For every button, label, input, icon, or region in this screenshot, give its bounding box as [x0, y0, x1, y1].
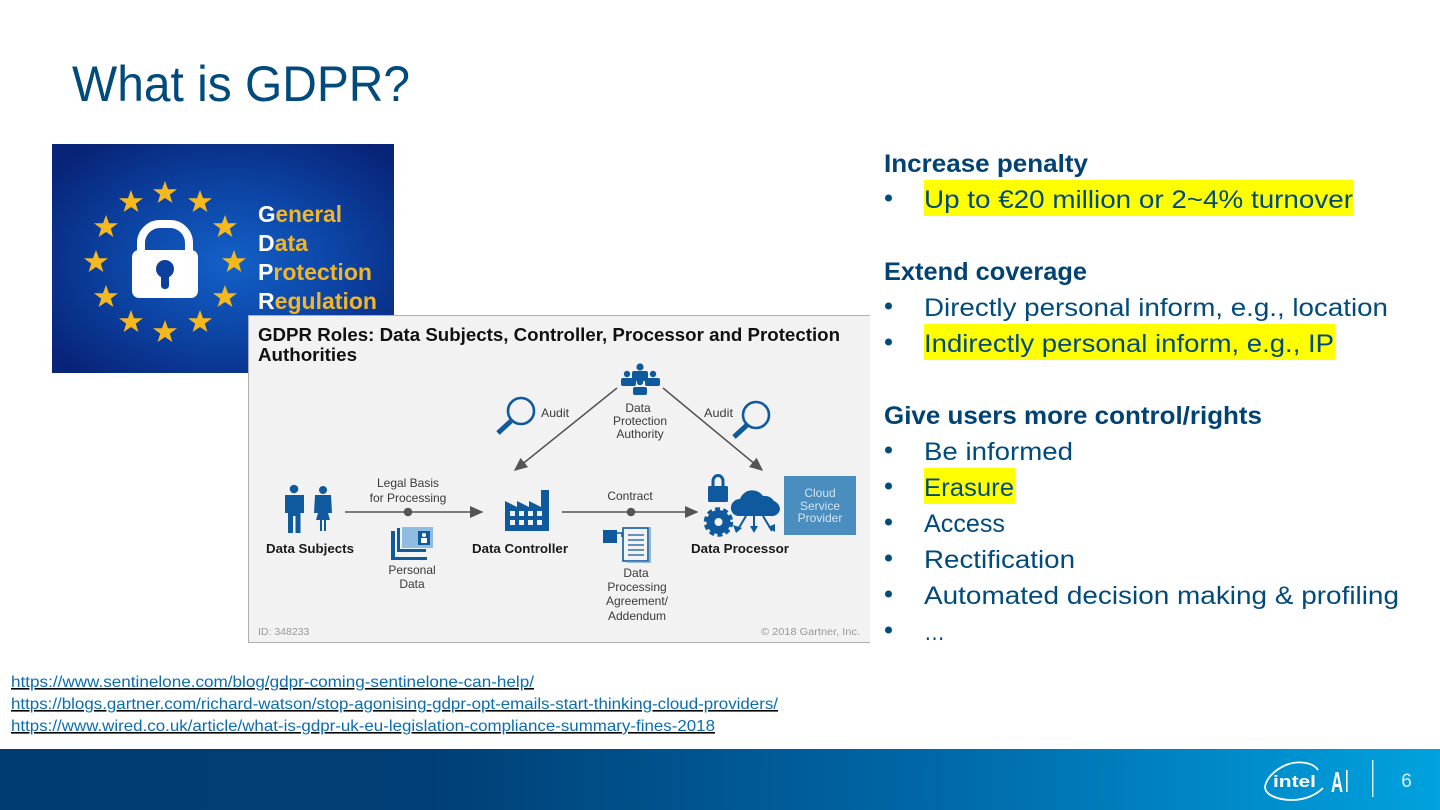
box: cloud service provider: Provider	[798, 511, 842, 525]
text block: increase penalty: Up to €20 million or 2~4% turnover	[924, 186, 1353, 214]
icon: padlock	[132, 224, 198, 298]
label: audit left: Audit	[541, 406, 570, 420]
banner text: General	[258, 201, 342, 227]
arrow: authority audits controller	[515, 388, 617, 470]
box: cloud service provider	[784, 476, 856, 535]
text block: extend coverage	[884, 258, 1388, 360]
text block: user rights: Rectification	[924, 546, 1075, 574]
icon: left magnifier	[498, 398, 534, 433]
label: data protection authority: Authority	[616, 427, 664, 441]
diagram heading: Authorities	[258, 344, 357, 365]
source links: https://blogs.gartner.com/richard-watson/stop-agonising-gdpr-opt-emails-start-thinking-cloud-providers/	[11, 696, 779, 713]
text block: user rights: …	[924, 618, 945, 646]
label: data controller: Data Controller	[472, 542, 568, 556]
label: data protection authority	[613, 401, 667, 441]
source links	[11, 674, 779, 735]
label: data subjects: Data Subjects	[266, 542, 354, 556]
label: data protection authority: Protection	[613, 414, 667, 428]
box: cloud service provider: Service	[800, 499, 840, 513]
icon: data processor lock, gear and cloud	[706, 476, 780, 535]
text block: extend coverage: Extend coverage	[884, 258, 1087, 286]
diagram heading	[258, 324, 840, 365]
icon: ring of EU stars	[84, 181, 246, 342]
text block: user rights: Be informed	[924, 438, 1073, 466]
icon: agreement document	[603, 527, 650, 562]
text block: user rights: Automated decision making & profiling	[924, 582, 1399, 610]
label: legal basis: for Processing	[370, 491, 446, 505]
text block: user rights: Access	[924, 510, 1005, 538]
arrow: authority audits processor	[663, 388, 762, 470]
diagram copyright: © 2018 Gartner, Inc.	[761, 626, 860, 638]
label: personal data: Data	[399, 577, 425, 591]
label: contract: Contract	[607, 489, 653, 503]
icon: data protection authority people	[621, 363, 660, 395]
label: data processing agreement	[606, 566, 669, 623]
page number: 6	[1401, 771, 1412, 792]
text block: extend coverage: Indirectly personal inform, e.g., IP	[924, 330, 1334, 358]
label: legal basis: Legal Basis	[377, 476, 439, 490]
label: data protection authority: Data	[625, 401, 651, 415]
text block: user rights: Give users more control/rights	[884, 402, 1262, 430]
banner text: Data	[258, 230, 308, 256]
icon: right magnifier	[734, 402, 769, 437]
source links: https://www.wired.co.uk/article/what-is-gdpr-uk-eu-legislation-compliance-summary-fines-2018	[11, 718, 715, 735]
label: data processing agreement: Processing	[607, 580, 667, 594]
banner text: Protection	[258, 259, 372, 285]
logo: intel AI: A	[1331, 767, 1343, 799]
divider	[1372, 760, 1374, 797]
text block: increase penalty	[884, 150, 1353, 216]
banner text: Regulation	[258, 288, 377, 314]
logo: intel AI: intel	[1273, 772, 1316, 791]
footer bar	[0, 749, 1440, 810]
label: personal data: Personal	[388, 563, 436, 577]
label: data processing agreement: Agreement/	[606, 594, 669, 608]
box: cloud service provider: Cloud	[804, 486, 836, 500]
label: personal data	[388, 563, 436, 591]
label: legal basis	[370, 476, 446, 505]
icon: personal data cards	[391, 527, 433, 560]
label: data processing agreement: Addendum	[608, 609, 666, 623]
arrow: subjects to controller	[345, 508, 482, 516]
icon: data subjects people	[285, 485, 332, 533]
label: data processing agreement: Data	[623, 566, 649, 580]
arrow: controller to processor	[562, 508, 697, 516]
label: data processor: Data Processor	[691, 542, 789, 556]
image: GDPR lock banner	[52, 144, 394, 373]
diagram id: ID: 348233	[258, 626, 310, 638]
diagram heading: GDPR Roles: Data Subjects, Controller, Processor and Protection	[258, 324, 840, 345]
icon: factory	[505, 490, 549, 531]
text block: increase penalty: Increase penalty	[884, 150, 1088, 178]
logo: intel AI	[1265, 762, 1348, 800]
source links: https://www.sentinelone.com/blog/gdpr-coming-sentinelone-can-help/	[11, 674, 535, 691]
title: What is GDPR?	[72, 56, 410, 112]
panel: GDPR roles diagram	[248, 315, 870, 643]
text block: extend coverage: Directly personal inform, e.g., location	[924, 294, 1388, 322]
text block: user rights	[884, 402, 1399, 646]
text block: user rights: Erasure	[924, 474, 1014, 502]
banner text	[258, 201, 377, 314]
label: audit right: Audit	[704, 406, 734, 420]
